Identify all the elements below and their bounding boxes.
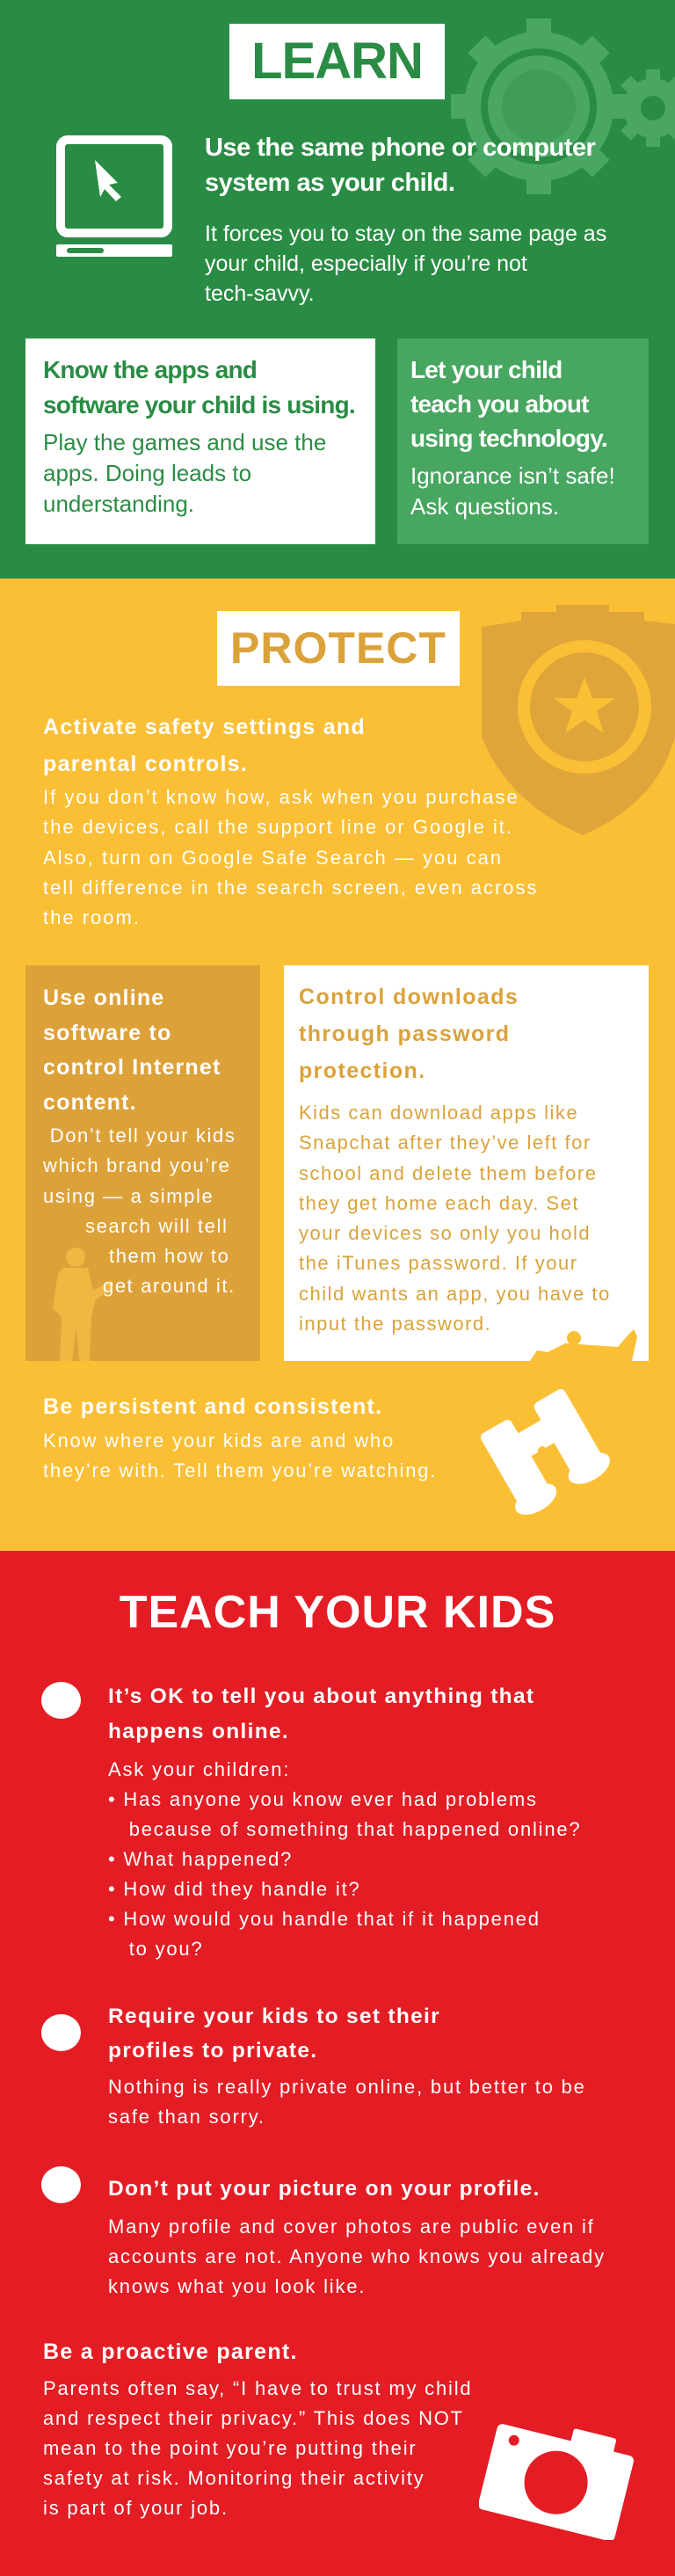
item: no picture: Many profile and cover photos are public even if [108, 2216, 595, 2238]
panel: online software: them how to [109, 1245, 229, 1267]
panel: online software: Don’t tell your kids [50, 1124, 236, 1146]
text: safety settings: parental controls. [43, 752, 248, 776]
item: ok to tell: • Has anyone you know ever had problems [108, 1788, 538, 1810]
text: proactive parent: Parents often say, “I have to trust my child [43, 2377, 472, 2399]
item: no picture: knows what you look like. [108, 2275, 366, 2297]
panel: online software: software to [43, 1020, 172, 1044]
item: private profiles: Nothing is really private online, but better to be [108, 2076, 586, 2098]
panel: online software: content. [43, 1090, 137, 1115]
panel: let your child teach: Ignorance isn’t safe! [410, 462, 615, 489]
panel: let your child teach: Let your child [410, 356, 562, 383]
section: protect [0, 579, 675, 1551]
panel: let your child teach: Ask questions. [410, 493, 559, 520]
text: safety settings: the room. [43, 906, 141, 928]
panel: control downloads: the iTunes password. If your [299, 1252, 578, 1274]
panel: online software: get around it. [103, 1275, 236, 1297]
icon: shield [482, 605, 675, 835]
text: same system: system as your child. [205, 169, 454, 197]
panel: let your child teach: teach you about [410, 390, 589, 418]
icon: computer [56, 135, 172, 257]
text: same system: It forces you to stay on the same page as [205, 222, 606, 246]
icon: gears [451, 18, 675, 194]
text: proactive parent: is part of your job. [43, 2497, 229, 2519]
panel: know the apps: Know the apps and [43, 356, 257, 383]
panel: control downloads: Snapchat after they’ve left for [299, 1132, 592, 1153]
text: same system: your child, especially if you’re not [205, 251, 527, 276]
panel: control downloads [284, 965, 649, 1361]
item: no picture [41, 2166, 606, 2297]
text: persistent: Be persistent and consistent. [43, 1394, 382, 1419]
item: ok to tell: • How would you handle that if it happened [108, 1908, 541, 1930]
item: ok to tell: • What happened? [108, 1848, 293, 1870]
item: private profiles [41, 2005, 586, 2128]
title: PROTECT: PROTECT [230, 623, 446, 673]
title: TEACH YOUR KIDS: TEACH YOUR KIDS [120, 1587, 555, 1638]
item: ok to tell [41, 1682, 581, 1960]
text: persistent: Know where your kids are and who [43, 1430, 395, 1452]
icon: person silhouette [53, 1248, 114, 1361]
panel: control downloads: input the password. [299, 1313, 491, 1335]
panel: online software [25, 965, 260, 1361]
panel: control downloads: they get home each day. Set [299, 1192, 579, 1214]
section: learn [0, 0, 675, 579]
text: proactive parent: and respect their privacy.” This does NOT [43, 2407, 464, 2429]
panel: let your child teach: using technology. [410, 425, 607, 452]
text: safety settings [43, 715, 539, 928]
text: safety settings: Also, turn on Google Safe Search — you can [43, 847, 503, 869]
panel: online software: using — a simple [43, 1185, 214, 1207]
title: LEARN [229, 24, 445, 99]
panel: control downloads: your devices so only you hold [299, 1222, 591, 1244]
panel: online software: which brand you’re [43, 1154, 230, 1176]
item: ok to tell: happens online. [108, 1720, 289, 1743]
text: persistent [43, 1394, 437, 1481]
panel: control downloads: school and delete them before [299, 1162, 597, 1184]
icon: bullet circle [41, 2014, 81, 2051]
text: same system: tech-savvy. [205, 281, 315, 306]
panel: online software: control Internet [43, 1055, 221, 1080]
item: ok to tell: because of something that happened online? [129, 1818, 581, 1840]
text: same system [205, 134, 606, 306]
panel: control downloads: protection. [299, 1059, 426, 1083]
panel: control downloads: Kids can download apps like [299, 1102, 578, 1124]
text: proactive parent: Be a proactive parent. [43, 2340, 298, 2364]
text: proactive parent: mean to the point you’re putting their [43, 2437, 417, 2459]
text: proactive parent [43, 2340, 472, 2519]
panel: let your child teach [397, 338, 649, 544]
panel: online software: search will tell [85, 1215, 229, 1237]
item: ok to tell: to you? [129, 1938, 204, 1960]
item: no picture: Don’t put your picture on your profile. [108, 2177, 541, 2201]
icon: bullet circle [41, 2166, 81, 2203]
item: private profiles: profiles to private. [108, 2039, 317, 2063]
item: private profiles: safe than sorry. [108, 2106, 265, 2128]
panel: online software: Use online [43, 986, 164, 1010]
text: safety settings: Activate safety settings and [43, 715, 366, 739]
icon: child lying [530, 1329, 637, 1361]
panel: know the apps: software your child is using. [43, 391, 355, 418]
text: proactive parent: safety at risk. Monitoring their activity [43, 2467, 425, 2489]
panel: know the apps [25, 338, 375, 544]
item: private profiles: Require your kids to set their [108, 2005, 440, 2028]
panel: control downloads: through password [299, 1022, 510, 1046]
item: ok to tell: Ask your children: [108, 1758, 290, 1780]
section: teach your kids [0, 1551, 675, 2576]
text: safety settings: tell difference in the search screen, even across [43, 877, 539, 899]
panel: control downloads: Control downloads [299, 985, 519, 1009]
item: no picture: accounts are not. Anyone who knows you already [108, 2245, 606, 2267]
title: LEARN: LEARN [251, 33, 423, 90]
panel: know the apps: understanding. [43, 491, 194, 517]
icon: bullet circle [41, 1682, 81, 1719]
icon: camera [479, 2424, 634, 2540]
item: ok to tell: It’s OK to tell you about anything that [108, 1685, 534, 1708]
panel: control downloads: child wants an app, you have to [299, 1283, 611, 1305]
title: PROTECT [217, 611, 460, 686]
text: same system: Use the same phone or computer [205, 134, 595, 162]
text: persistent: they’re with. Tell them you’re watching. [43, 1459, 437, 1481]
item: ok to tell: • How did they handle it? [108, 1878, 361, 1900]
text: safety settings: the devices, call the support line or Google it. [43, 816, 513, 838]
panel: know the apps: apps. Doing leads to [43, 460, 251, 486]
icon: binoculars [481, 1389, 610, 1515]
panel: know the apps: Play the games and use the [43, 429, 326, 455]
text: safety settings: If you don’t know how, ask when you purchase [43, 786, 519, 808]
